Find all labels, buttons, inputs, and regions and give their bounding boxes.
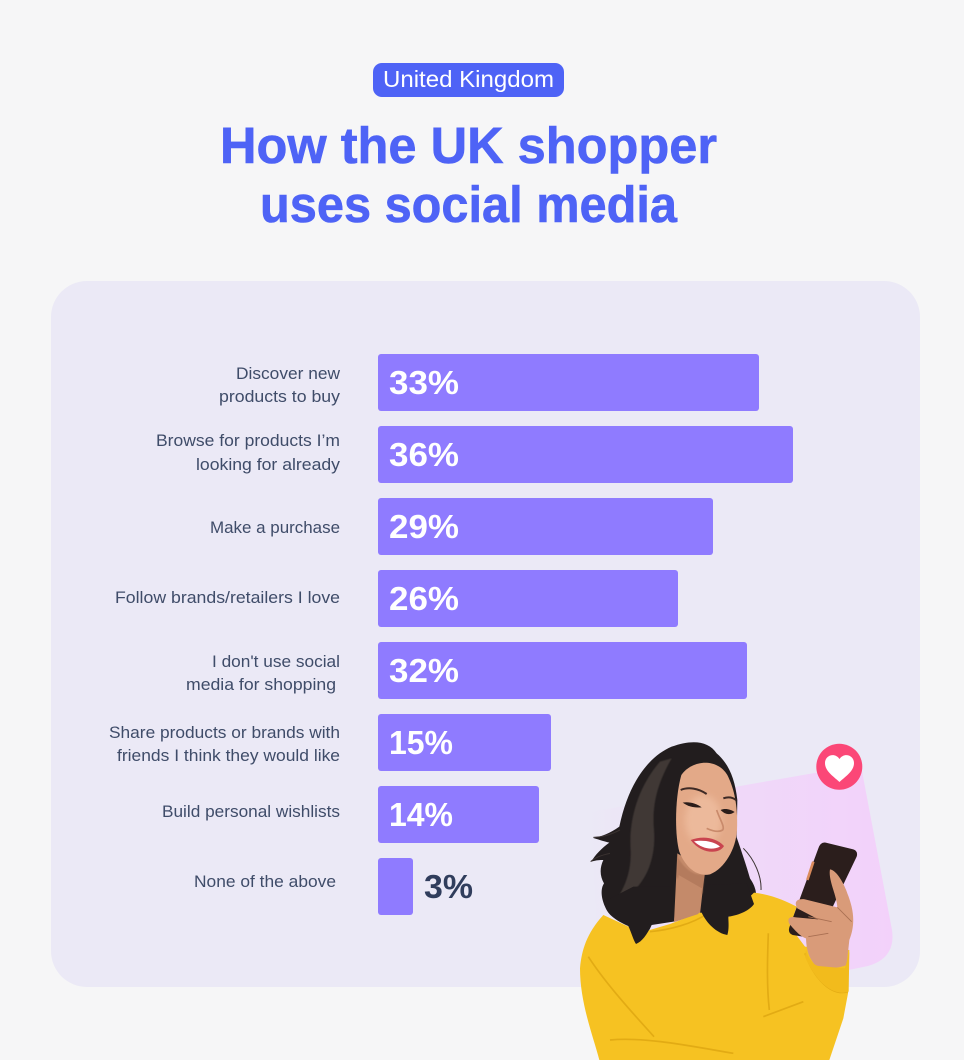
pink backdrop shape bbox=[590, 766, 892, 986]
row: make a purchase bbox=[210, 498, 713, 555]
bar chart bbox=[109, 354, 793, 915]
phone orange edge bbox=[807, 862, 813, 880]
row: no social media for shopping bbox=[186, 642, 747, 699]
neck shadow bbox=[677, 857, 705, 894]
phone bbox=[789, 843, 857, 938]
row: discover new products: 33% bbox=[389, 364, 459, 401]
title bbox=[220, 117, 717, 233]
row: browse for products: Browse for products I’m bbox=[156, 431, 340, 450]
cheek light bbox=[685, 795, 722, 845]
row: share products: friends I think they would like bbox=[117, 746, 340, 765]
row: build wishlists: Build personal wishlists bbox=[162, 802, 340, 821]
row: none of the above: 3% bbox=[424, 868, 473, 905]
row: share products: 15% bbox=[389, 724, 453, 761]
row: browse for products: 36% bbox=[389, 436, 459, 473]
eyes and brows bbox=[681, 788, 736, 814]
row: make a purchase: 29% bbox=[389, 508, 459, 545]
nose shadow bbox=[707, 810, 723, 831]
row: no social media for shopping: media for shopping bbox=[186, 675, 336, 694]
row: share products: Share products or brands with bbox=[109, 723, 340, 742]
title: uses social media bbox=[260, 176, 678, 233]
row: discover new products: Discover new bbox=[236, 364, 341, 383]
row: no social media for shopping: I don't use social bbox=[212, 652, 340, 671]
row: follow brands: Follow brands/retailers I love bbox=[115, 588, 340, 607]
badge: United Kingdom bbox=[373, 63, 564, 97]
stray hair wisps bbox=[591, 830, 761, 890]
badge: United Kingdom: United Kingdom bbox=[383, 66, 554, 92]
sweater bbox=[580, 893, 849, 1060]
row: none of the above: None of the above bbox=[194, 872, 336, 891]
hair highlights bbox=[615, 758, 672, 902]
row: follow brands: 26% bbox=[389, 580, 459, 617]
photo: woman in yellow sweater with phone bbox=[580, 742, 857, 1060]
smile bbox=[691, 838, 724, 852]
row: none of the above bbox=[194, 858, 473, 915]
sweater folds bbox=[588, 914, 848, 1053]
row: browse for products: looking for already bbox=[196, 455, 341, 474]
row: browse for products bbox=[156, 426, 793, 483]
neck bbox=[674, 853, 705, 922]
neck front bbox=[674, 875, 702, 922]
sweater cuff bbox=[805, 950, 849, 993]
hair over shoulder bbox=[604, 883, 754, 944]
row: build wishlists bbox=[162, 786, 539, 843]
hair back bbox=[591, 742, 756, 944]
row: discover new products: products to buy bbox=[219, 387, 341, 406]
finger lines bbox=[808, 907, 852, 937]
panel: chart background bbox=[51, 281, 920, 987]
face bbox=[676, 763, 737, 875]
row: discover new products bbox=[219, 354, 759, 411]
title: How the UK shopper bbox=[220, 117, 717, 174]
row: build wishlists: 14% bbox=[389, 796, 453, 833]
row: follow brands bbox=[115, 570, 678, 627]
row: no social media for shopping: 32% bbox=[389, 652, 459, 689]
row: make a purchase: Make a purchase bbox=[210, 518, 340, 537]
icon: heart badge bbox=[816, 744, 862, 790]
row: share products bbox=[109, 714, 551, 771]
hand bbox=[788, 869, 853, 968]
